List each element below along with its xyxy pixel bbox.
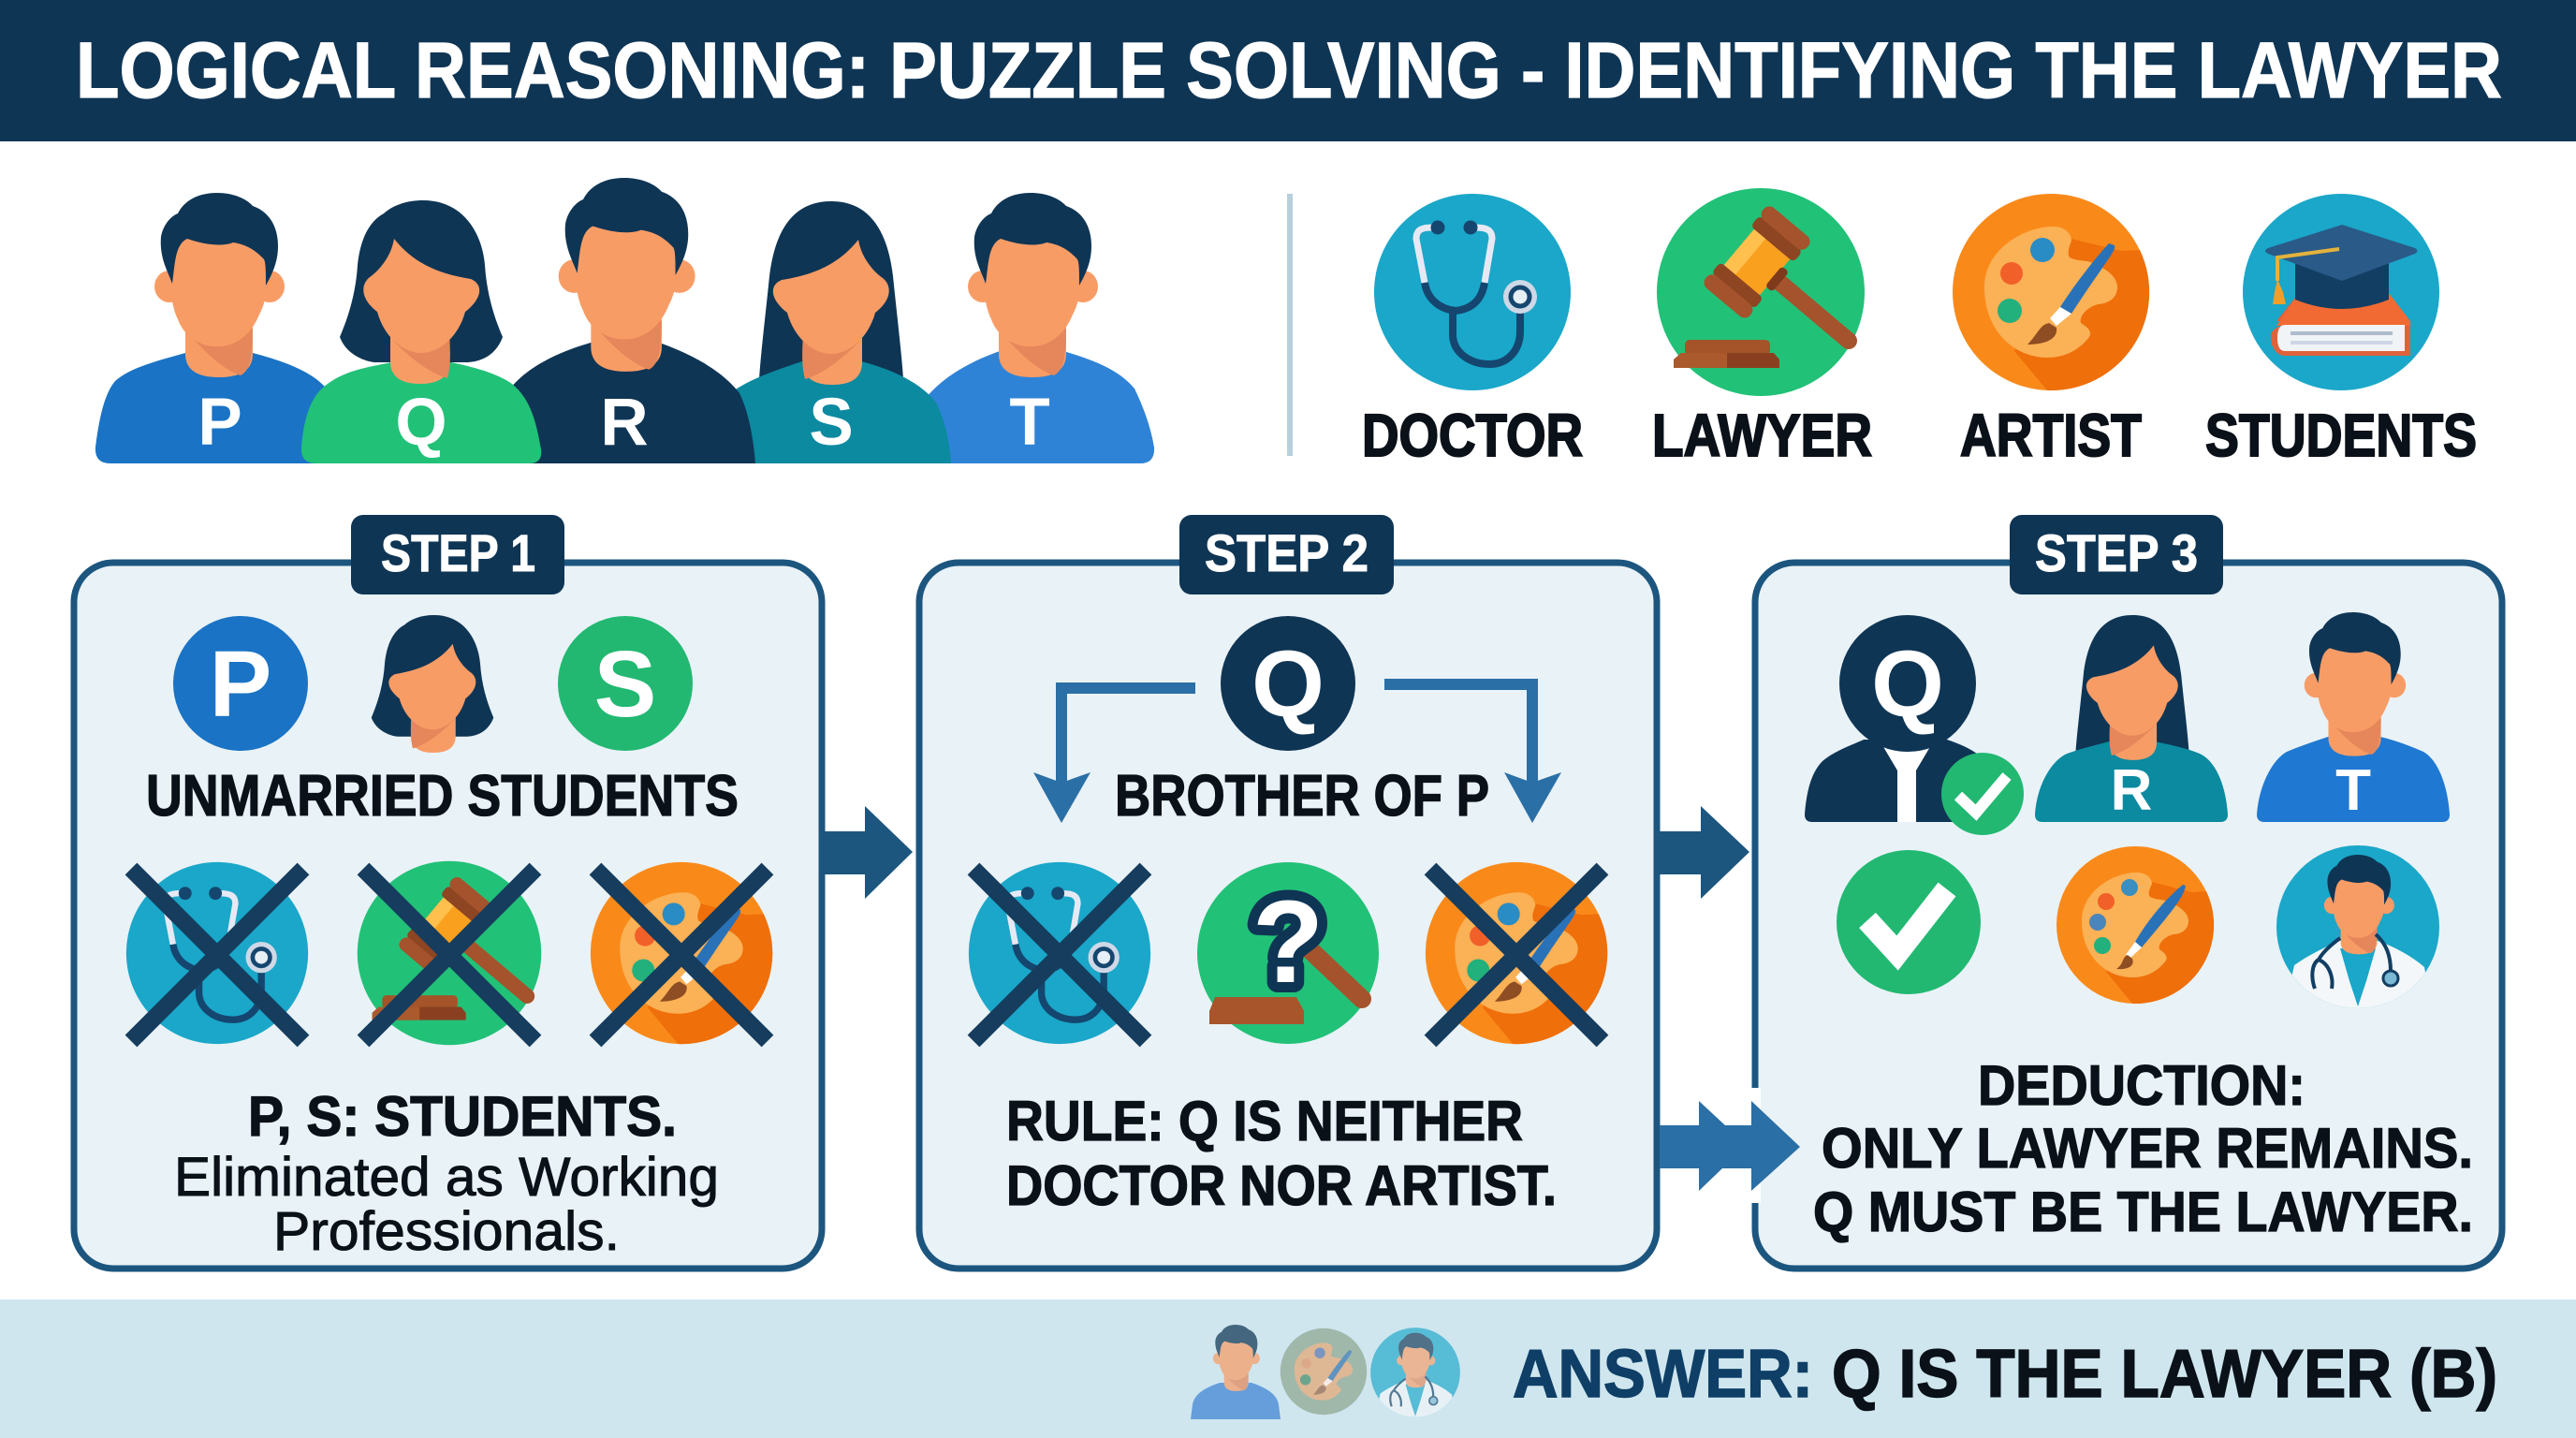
- step 2 rule: [1006, 1090, 1557, 1217]
- woman icon: [372, 615, 493, 753]
- person T: T: [1009, 386, 1050, 460]
- step 2 rule: DOCTOR NOR ARTIST.: [1006, 1154, 1557, 1217]
- step 1 badge: STEP 1: [381, 523, 535, 582]
- icon: artist legend: [1953, 194, 2149, 469]
- person R: [510, 178, 755, 463]
- P badge: [173, 616, 308, 751]
- icon: lawyer legend: LAWYER: [1652, 402, 1872, 469]
- lawyer with question mark: [1197, 862, 1379, 1044]
- Q badge: [1221, 616, 1355, 751]
- answer label: ANSWER:: [1513, 1337, 1813, 1412]
- panel: step 1: [74, 515, 822, 1269]
- arrow: left connector: [1033, 688, 1195, 823]
- step 3 deduction: [1813, 1054, 2473, 1243]
- person Q: [301, 200, 541, 463]
- person R: [2035, 615, 2228, 823]
- step 2 rule: RULE: Q IS NEITHER: [1006, 1090, 1523, 1152]
- Q badge: Q: [1251, 632, 1325, 737]
- person S: [730, 201, 951, 463]
- faded artist icon: [1281, 1328, 1367, 1415]
- S badge: [558, 616, 693, 751]
- person R: R: [600, 386, 649, 460]
- Q lawyer figure: Q: [1871, 632, 1944, 737]
- crossed lawyer: [358, 861, 541, 1045]
- step 3 deduction: Q MUST BE THE LAWYER.: [1813, 1181, 2473, 1243]
- icon: students legend: STUDENTS: [2205, 402, 2477, 469]
- step 3 badge: STEP 3: [2035, 523, 2198, 582]
- group of five people: [95, 178, 1154, 463]
- P badge: P: [210, 632, 271, 737]
- doctor portrait icon: [2276, 845, 2439, 1016]
- person P: P: [198, 386, 242, 460]
- lawyer with question mark: ?: [1252, 877, 1324, 1007]
- crossed doctor: [126, 862, 308, 1044]
- step 2 badge: STEP 2: [1205, 523, 1368, 582]
- S badge: S: [594, 632, 656, 737]
- step 1 explanation: Eliminated as Working: [174, 1147, 719, 1208]
- icon: doctor legend: DOCTOR: [1362, 402, 1583, 469]
- panel: step 3: [1755, 515, 2502, 1269]
- crossed artist: [591, 862, 772, 1044]
- step 3 deduction: ONLY LAWYER REMAINS.: [1822, 1117, 2473, 1180]
- crossed artist: [1426, 862, 1607, 1044]
- heading: unmarried students: UNMARRIED STUDENTS: [146, 764, 739, 829]
- step 1 badge: [351, 515, 564, 594]
- icon: artist legend: ARTIST: [1960, 402, 2142, 469]
- person P: [95, 193, 329, 463]
- person T: [926, 193, 1154, 463]
- arrow: double-headed rule to deduction: [1660, 1088, 1800, 1203]
- person T: [2257, 612, 2450, 823]
- person R: R: [2111, 758, 2152, 823]
- step 1 explanation: P, S: STUDENTS.: [248, 1085, 677, 1148]
- step 3 badge: [2010, 515, 2223, 594]
- faded doctor icon: [1370, 1328, 1460, 1421]
- heading: brother of P: BROTHER OF P: [1115, 764, 1489, 829]
- person Q: Q: [395, 386, 447, 460]
- crossed doctor: [969, 862, 1150, 1044]
- title banner: [0, 0, 2576, 141]
- arrow: right connector: [1384, 684, 1561, 823]
- icon: students legend: [2205, 194, 2477, 469]
- Q lawyer figure: [1805, 615, 2024, 835]
- person T: T: [2335, 758, 2371, 823]
- panel: step 2: [919, 515, 1657, 1269]
- step 1 explanation: [174, 1085, 719, 1262]
- arrow: step 2 to step 3: [1660, 806, 1749, 899]
- artist palette icon: [2056, 846, 2214, 1004]
- answer text: Q IS THE LAWYER (B): [1832, 1337, 2497, 1412]
- arrow: step 1 to step 2: [825, 806, 913, 899]
- step 2 badge: [1179, 515, 1394, 594]
- check circle: [1837, 850, 1981, 994]
- step 3 deduction: DEDUCTION:: [1978, 1054, 2305, 1117]
- vertical divider: [1287, 194, 1293, 456]
- step 1 explanation: Professionals.: [273, 1201, 620, 1262]
- icon: lawyer legend: [1652, 188, 1872, 469]
- person S: S: [809, 386, 854, 460]
- icon: doctor legend: [1362, 194, 1583, 469]
- answer band: [0, 1299, 2576, 1438]
- faded person icon: [1191, 1325, 1281, 1419]
